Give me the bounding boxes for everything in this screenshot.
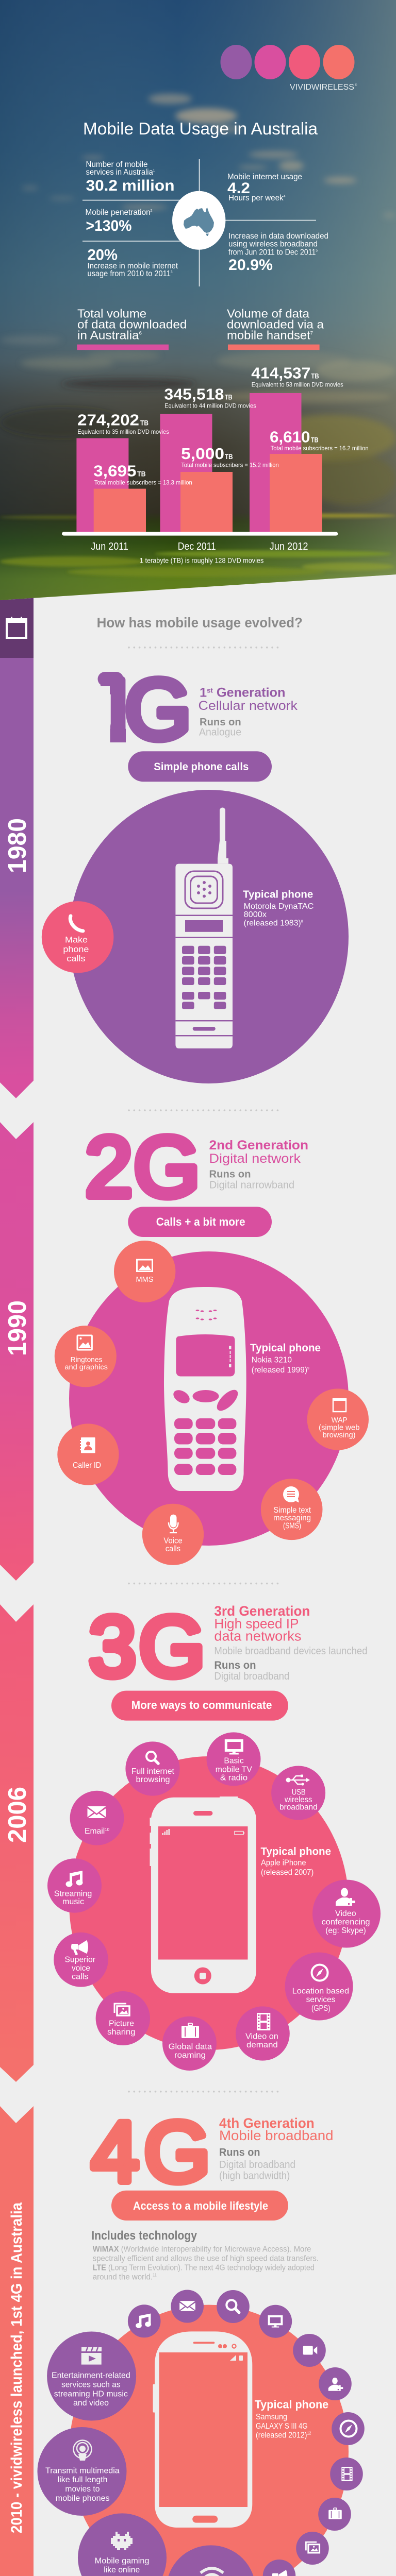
bubble: transmit multimedia: mobile phones (56, 2494, 110, 2503)
bubble: location based services: services (306, 1995, 335, 2004)
value: Jun 2012 handset: TB (311, 435, 319, 444)
bubble: video on demand (236, 2006, 290, 2061)
axis labels (91, 541, 308, 552)
bubble: SMS (261, 1479, 323, 1540)
big label: 1G: G (125, 662, 191, 757)
text: includes technology: spectrally efficient and allows the use of high speed data transfers. (93, 2254, 319, 2263)
circle: 2G backdrop (69, 1251, 349, 1546)
bubble: full internet browsing: browsing (136, 1775, 170, 1784)
bubble: video conferencing: conferencing (322, 1918, 370, 1927)
bubble: transmit multimedia: movies to (65, 2485, 100, 2494)
bubble: USB wireless broadband: broadband (279, 1803, 318, 1811)
big label: 4G (91, 2105, 210, 2200)
logo: vividwireless: VIVIDWIRELESS (290, 83, 354, 92)
bubble: global data roaming (162, 2016, 217, 2071)
legend: handset volume: 7 (310, 331, 313, 336)
stat: internet usage growth: usage from 2010 to 2011 (88, 269, 176, 278)
bubble: email: 10 (105, 1827, 110, 1832)
value: Dec 2011 total: Equivalent to 44 million DVD movies (164, 402, 256, 410)
text: 2G description: Digital network (209, 1151, 301, 1166)
bubble: WAP: (simple web (319, 1423, 360, 1432)
big label: 1G: 1 (93, 662, 140, 757)
text: 3G description: Mobile broadband devices launched (214, 1646, 368, 1657)
text: typical 4G phone: 12 (307, 2431, 311, 2436)
legend: total volume (77, 307, 187, 350)
pill: calls and a bit more (128, 1207, 272, 1237)
bubble: picture sharing: Picture (109, 2020, 134, 2028)
bubble: streaming music: music (62, 1897, 84, 1906)
text: typical 4G phone: GALAXY S III 4G (256, 2422, 308, 2431)
pill: more ways to communicate (111, 1691, 288, 1721)
panel: data volume chart (62, 307, 369, 565)
text: 1G description: Generation (213, 686, 286, 700)
panel: sky and meadow photo background (0, 0, 396, 603)
phone illustration: Samsung Galaxy S III (153, 2331, 252, 2528)
stat: internet usage growth: Increase in mobile internet (88, 262, 178, 270)
stat: internet usage growth: 3 (171, 270, 173, 274)
value: Dec 2011 total: 345,518 (164, 385, 224, 403)
text: 3G description: Runs on (214, 1659, 256, 1671)
text: 3G description: 3rd Generation (214, 1603, 310, 1619)
axis labels: Jun 2012 (270, 541, 308, 552)
big label: 3G (89, 1599, 205, 1694)
stat: wireless broadband growth: 5 (316, 249, 318, 253)
legend: total volume: of data downloaded (77, 317, 187, 331)
timeline bar: 2006 (0, 1604, 34, 2082)
big label: 4G: 4 (91, 2105, 139, 2200)
logo: vividwireless (221, 45, 357, 92)
stat: wireless broadband growth: Increase in data downloaded (228, 232, 328, 241)
bubble: superior voice calls: Superior (64, 1955, 96, 1964)
circle: 4G backdrop (69, 2305, 349, 2576)
text: typical 4G phone: Typical phone (255, 2398, 328, 2411)
text: typical 1G phone: 8000x (244, 910, 267, 919)
bubble: transmit multimedia: Transmit multimedia (45, 2466, 120, 2475)
timeline bar: 1980 (0, 658, 34, 1098)
stat: wireless broadband growth: 20.9% (228, 257, 273, 274)
bubble: WAP: browsing) (323, 1431, 356, 1439)
stat: internet usage growth: 20% (88, 246, 118, 264)
text: includes technology: LTE (Long Term Evolution). The next 4G technology widely adopted (93, 2264, 315, 2273)
stat: mobile services: services in Australia (86, 168, 156, 177)
timeline bar: 2006: 2006 (4, 1787, 31, 1843)
text: typical 2G phone: Nokia 3210 (252, 1356, 292, 1364)
bubble: USB wireless broadband: USB (292, 1788, 306, 1797)
text: includes technology: around the world. (93, 2273, 156, 2281)
text: 3G description: Digital broadband (214, 1671, 289, 1682)
value: Jun 2011 total: Equivalent to 35 million DVD movies (77, 428, 169, 435)
bubble: global data roaming: Global data (169, 2043, 212, 2052)
text: 2G description (209, 1138, 308, 1191)
panel: 4G (37, 2105, 365, 2576)
bubble: picture sharing: sharing (107, 2028, 135, 2037)
text: 4G description: 4th Generation (219, 2115, 315, 2131)
icon: music (136, 2313, 151, 2328)
value: Dec 2011 handset (181, 445, 279, 469)
small icon ring (128, 2290, 365, 2576)
bubble: superior voice calls: voice (72, 1964, 90, 1973)
icon: email (179, 2301, 195, 2311)
value: Jun 2012 handset: 6,610 (270, 428, 310, 446)
pill: access to a mobile lifestyle (111, 2191, 288, 2221)
value: Jun 2012 total (251, 364, 343, 388)
pill: calls and a bit more: Calls + a bit more (156, 1215, 245, 1228)
phone illustration: iPhone (150, 1797, 256, 1993)
stat: hours per week: 4.2 (227, 180, 250, 197)
value: Dec 2011 handset: 5,000 (181, 445, 224, 463)
value: Dec 2011 handset: TB (225, 452, 233, 461)
title: Mobile Data Usage in Australia (83, 119, 318, 138)
big label: 1G (93, 662, 191, 757)
timeline bar: 1990 (0, 1122, 34, 1581)
bubble: picture sharing (96, 1991, 150, 2045)
bubble: video conferencing: (eg: Skype) (325, 1926, 366, 1935)
bubble: mobile gaming: like online (104, 2566, 140, 2574)
text: 1G description: Runs on (200, 717, 241, 728)
bubble: USB wireless broadband (271, 1766, 325, 1820)
text: 2G description: Runs on (209, 1168, 251, 1180)
bubble: entertainment services (47, 2332, 136, 2420)
bubble: ringtones and graphics (55, 1326, 117, 1387)
stat: mobile services: 30.2 million (86, 177, 174, 194)
value: Dec 2011 total (164, 385, 256, 410)
text: 1G description: st (207, 687, 213, 694)
bubble: streaming music (47, 1858, 102, 1913)
bubble: email (70, 1791, 124, 1845)
bubble: full internet browsing: Full internet (131, 1767, 175, 1776)
bubble: video conferencing (312, 1879, 381, 1947)
bubble: ringtones and graphics: Ringtones (71, 1355, 102, 1363)
text: typical 4G phone (255, 2398, 328, 2440)
bubble: SMS: (SMS) (283, 1521, 301, 1530)
bubble: transmit multimedia (37, 2427, 127, 2516)
phone illustration: Motorola DynaTAC (175, 808, 233, 1048)
stat: mobile services (86, 160, 174, 194)
value: Jun 2012 handset: Total mobile subscribers = 16.2 million (271, 445, 369, 452)
timeline sidebar (0, 598, 34, 2576)
legend: handset volume: Volume of data (227, 307, 309, 320)
value: Jun 2011 total: TB (140, 419, 148, 427)
bubble: entertainment services: streaming HD music (54, 2389, 128, 2398)
big label: 3G: G (139, 1599, 205, 1694)
text: typical 2G phone: 9 (307, 1367, 309, 1370)
value: Jun 2011 handset: 3,695 (93, 462, 136, 480)
bubble: wireless ADSL alternative (166, 2545, 256, 2576)
stat: hours per week (227, 173, 302, 202)
text: typical 1G phone (243, 889, 314, 927)
value: Jun 2011 handset: TB (137, 470, 146, 478)
bubble: voice calls: Voice (163, 1536, 183, 1545)
heading: how has usage evolved: How has mobile usage evolved? (97, 615, 303, 630)
pill: access to a mobile lifestyle: Access to a mobile lifestyle (133, 2199, 268, 2212)
value: Jun 2011 handset: Total mobile subscribers = 13.3 million (94, 479, 192, 486)
text: typical 4G phone: (released 2012) (256, 2431, 314, 2440)
timeline bar: 2010 (0, 2106, 34, 2576)
bubble: basic mobile TV and radio: mobile TV (216, 1766, 252, 1774)
legend: total volume: 6 (139, 331, 142, 336)
bubble: voice calls: calls (166, 1545, 180, 1553)
bubble: location based services: Location based (292, 1987, 349, 1996)
bubble: video conferencing: Video (335, 1909, 356, 1918)
logo: vividwireless: ® (355, 83, 357, 87)
text: 3G description: High speed IP (214, 1616, 299, 1632)
legend: handset volume: mobile handset (227, 329, 307, 342)
axis labels: Dec 2011 (178, 541, 216, 552)
text: includes technology: 11 (153, 2273, 157, 2277)
stat: mobile penetration: Mobile penetration (86, 208, 151, 217)
stat: hours per week: Hours per week (228, 194, 285, 202)
bubble: caller ID: Caller ID (73, 1461, 101, 1470)
stat: mobile penetration: 2 (151, 209, 153, 213)
value: Jun 2011 total: 274,202 (77, 411, 139, 429)
bubble: entertainment services: and video (73, 2399, 109, 2408)
bubble: SMS: Simple text (273, 1506, 311, 1515)
bubble: WAP (307, 1388, 369, 1450)
bubble: USB wireless broadband: wireless (284, 1795, 312, 1804)
icon: Australia map in circle (172, 191, 225, 250)
text: typical 3G phone: (released 2007) (261, 1868, 314, 1877)
bubble: voice calls (142, 1504, 204, 1565)
pill: simple phone calls: Simple phone calls (154, 761, 249, 773)
big label: 4G: G (144, 2105, 210, 2200)
bubble: transmit multimedia: like full length (58, 2476, 108, 2484)
stat: hours per week: 4 (284, 195, 286, 198)
bubble: video on demand: Video on (245, 2032, 278, 2041)
bubble: make phone calls: calls (67, 954, 86, 963)
text: typical 4G phone: Samsung (256, 2413, 287, 2421)
stat: mobile services: Number of mobile (86, 160, 147, 169)
text: 4G description: Mobile broadband (219, 2128, 333, 2143)
text: typical 1G phone: 8 (301, 920, 303, 923)
bubble: entertainment services: Entertainment-related (52, 2371, 130, 2380)
axis labels: Jun 2011 (91, 541, 128, 552)
icon: person (328, 2378, 343, 2391)
bubble: location based services: (GPS) (311, 2004, 331, 2013)
panel: Australia statistics (82, 159, 328, 286)
value: Jun 2012 handset (270, 428, 369, 452)
bubble: MMS: MMS (136, 1275, 154, 1284)
icon: screen (268, 2315, 283, 2328)
bubble: ringtones and graphics: and graphics (64, 1363, 108, 1371)
text: 1G description (198, 686, 298, 738)
text: typical 1G phone: Motorola DynaTAC (244, 902, 314, 911)
bubble: mobile gaming: Mobile gaming (95, 2556, 150, 2565)
bubble: basic mobile TV and radio: Basic (224, 1757, 244, 1766)
bubble: entertainment services: services such as (61, 2380, 121, 2389)
phone illustration: Nokia 3210 (164, 1287, 246, 1491)
value: Dec 2011 total: TB (225, 393, 233, 401)
text: 4G description (219, 2115, 333, 2181)
text: 4G description: Runs on (219, 2147, 260, 2159)
text: 1G description: 1 (200, 686, 207, 700)
text: typical 2G phone (250, 1342, 321, 1375)
text: 4G description: (high bandwidth) (219, 2170, 290, 2181)
icon: compass (340, 2420, 357, 2437)
legend: handset volume: downloaded via a (227, 317, 324, 331)
bubble: full internet browsing (125, 1741, 180, 1796)
value: Jun 2012 total: 414,537 (251, 364, 310, 382)
big label: 2G: 2 (85, 1120, 133, 1215)
icon: film (341, 2467, 353, 2481)
bubble: global data roaming: roaming (174, 2051, 206, 2060)
timeline bar: 2010: 2010 - vividwireless launched, 1st 4G in Australia (8, 2202, 25, 2533)
icon: video camera (303, 2346, 317, 2355)
bubble: location based services (285, 1953, 353, 2021)
icon: suitcase (328, 2508, 342, 2519)
text: typical 2G phone: (released 1999) (252, 1366, 309, 1375)
bubble: WAP: WAP (332, 1416, 348, 1425)
circle: 3G backdrop (69, 1756, 349, 2050)
text: typical 3G phone: Typical phone (261, 1845, 331, 1857)
bubble: superior voice calls (54, 1933, 108, 1987)
bubble: make phone calls: Make (65, 935, 88, 945)
pill: simple phone calls (128, 751, 272, 782)
stat: mobile penetration: >130% (86, 217, 132, 234)
bubble: streaming music: Streaming (54, 1890, 92, 1899)
bubble: basic mobile TV and radio: & radio (220, 1774, 248, 1783)
text: includes technology: WiMAX (Worldwide Interoperability for Microwave Access). More (93, 2245, 311, 2253)
panel: 2G (55, 1120, 369, 1565)
bubble: make phone calls (42, 901, 113, 973)
bubble: make phone calls: phone (63, 944, 89, 954)
bubble: basic mobile TV and radio (206, 1732, 261, 1786)
icon: megaphone (272, 2569, 287, 2576)
stat: wireless broadband growth (228, 232, 328, 274)
bubble: caller ID (57, 1423, 119, 1485)
text: typical 1G phone: Typical phone (243, 889, 313, 900)
big label: 3G: 3 (89, 1599, 136, 1694)
big label: 2G (85, 1120, 200, 1215)
pill: more ways to communicate: More ways to communicate (131, 1699, 272, 1711)
stat: mobile penetration (86, 208, 153, 234)
timeline bar: 1980: 1980 (4, 818, 31, 873)
panel: 1G (42, 662, 349, 1083)
bubble: superior voice calls: calls (72, 1972, 88, 1981)
bubble: email: Email (85, 1827, 105, 1836)
text: 3G description (214, 1603, 368, 1682)
text: typical 3G phone: Apple iPhone (261, 1858, 306, 1867)
text: 3G description: data networks (214, 1628, 301, 1643)
text: typical 3G phone (261, 1845, 331, 1877)
bubble: mobile gaming (78, 2513, 167, 2576)
value: Jun 2011 handset (93, 462, 192, 486)
value: Jun 2011 total (77, 411, 169, 435)
bubble: MMS (114, 1241, 175, 1302)
panel: 3G (47, 1599, 381, 2071)
bubble: video on demand: demand (246, 2041, 278, 2049)
legend: total volume: Total volume (77, 307, 146, 320)
icon: pictures (306, 2542, 320, 2553)
stat: wireless broadband growth: from Jun 2011 to Dec 2011 (228, 248, 324, 257)
text: typical 2G phone: Typical phone (250, 1342, 321, 1354)
stat: hours per week: Mobile internet usage (227, 173, 302, 181)
icon: calendar (0, 598, 34, 658)
timeline bar: 1990: 1990 (4, 1300, 31, 1356)
text: includes technology (91, 2229, 319, 2281)
circle: 1G backdrop (69, 790, 349, 1083)
text: includes technology: Includes technology (91, 2229, 197, 2243)
text: 2G description: Digital narrowband (209, 1180, 294, 1191)
value: Jun 2012 total: Equivalent to 53 million DVD movies (252, 381, 343, 388)
stat: wireless broadband growth: using wireless broadband (228, 240, 318, 249)
big label: 2G: G (134, 1120, 200, 1215)
text: 4G description: Digital broadband (219, 2159, 295, 2171)
text: 2G description: 2nd Generation (209, 1138, 308, 1153)
value: Jun 2012 total: TB (311, 371, 319, 380)
stat: internet usage growth (88, 246, 178, 278)
value: Dec 2011 handset: Total mobile subscribers = 15.2 million (181, 462, 279, 469)
legend: handset volume (227, 307, 324, 350)
bar chart: total and handset bars (62, 393, 338, 536)
text: typical 1G phone: (released 1983) (244, 919, 302, 927)
chart note: 1 terabyte (TB) is roughly 128 DVD movies (140, 556, 263, 565)
text: 1G description: Cellular network (198, 699, 298, 713)
stat: mobile services: 1 (153, 169, 155, 173)
divider cross (82, 159, 316, 286)
bubble: SMS: messaging (273, 1514, 311, 1522)
icon: search (226, 2300, 239, 2313)
legend: total volume: in Australia (77, 329, 136, 342)
text: 1G description: Analogue (199, 727, 241, 738)
